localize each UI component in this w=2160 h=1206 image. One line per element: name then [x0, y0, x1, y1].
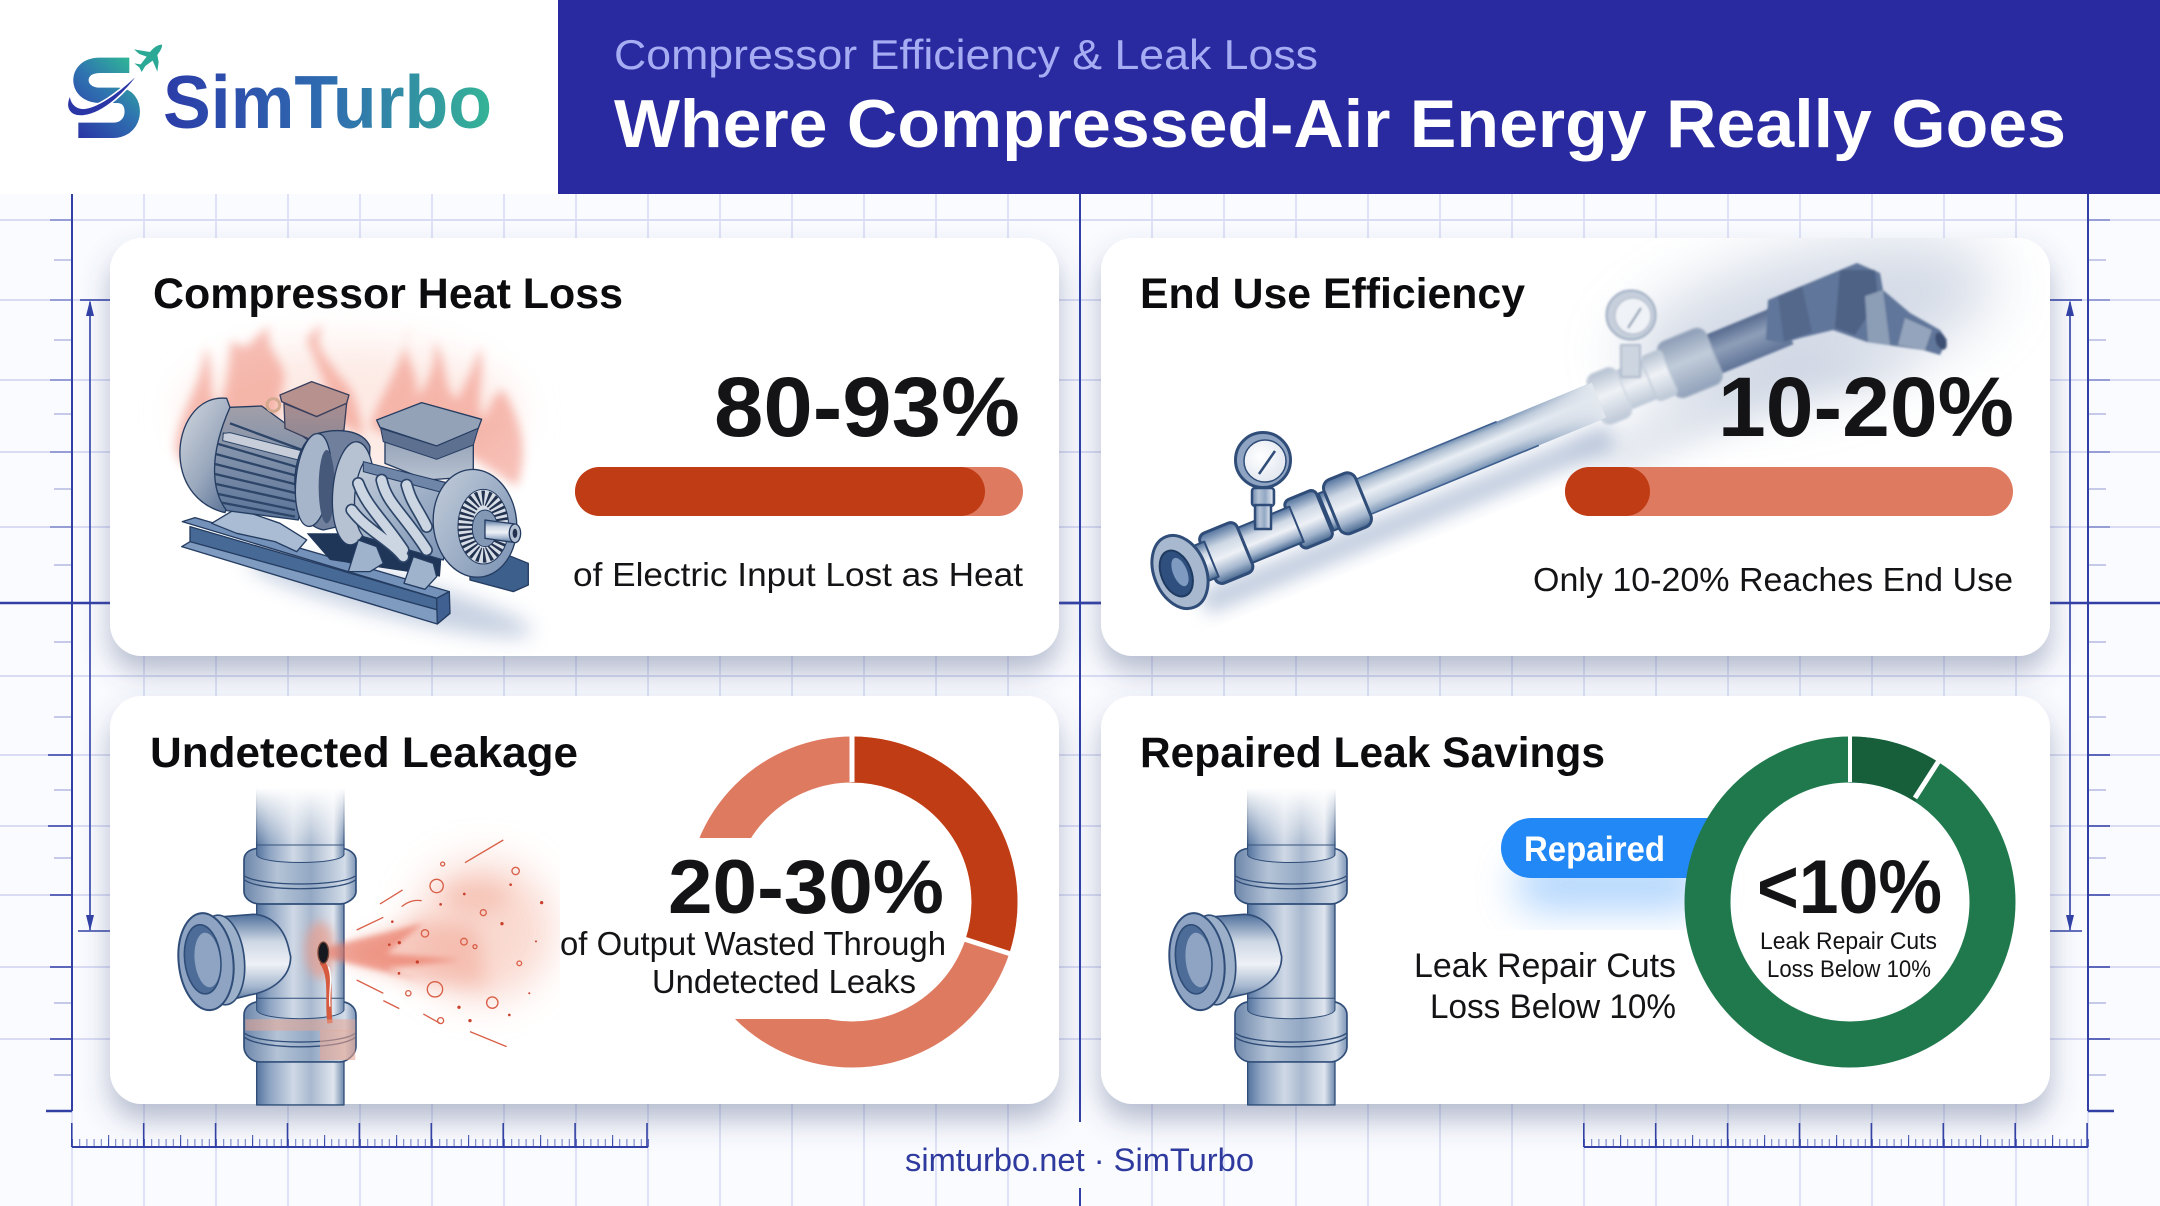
gauge near inlet	[1236, 432, 1290, 529]
faded gauge	[1606, 290, 1656, 377]
card heading: Repaired Leak Savings	[1140, 729, 1605, 777]
footer credit: simturbo.net · SimTurbo	[905, 1142, 1254, 1178]
illustration: compressor with flames	[175, 325, 537, 652]
panel: undetected leakage	[110, 696, 1059, 1105]
logo panel	[0, 0, 558, 194]
card heading: Compressor Heat Loss	[153, 270, 623, 318]
illustration: leaking pipe tee	[174, 780, 553, 1105]
donut caption: Loss Below 10%	[1767, 956, 1931, 983]
side caption: Loss Below 10%	[1430, 988, 1676, 1026]
text mask over donut	[560, 838, 850, 1019]
stat: 20-30%: 20-30%	[668, 845, 944, 930]
card heading: Undetected Leakage	[150, 729, 578, 777]
header subtitle: Compressor Efficiency & Leak Loss	[614, 31, 1318, 78]
haze behind pipe	[1582, 238, 2012, 467]
donut caption: Leak Repair Cuts	[1760, 928, 1937, 955]
donut chart: below 10%	[1708, 736, 1992, 1044]
header banner	[558, 0, 2160, 194]
logo wordmark: SimTurbo	[163, 60, 492, 144]
progress bar: 10-20%	[1565, 467, 2013, 516]
stat caption: Only 10-20% Reaches End Use	[1533, 561, 2013, 598]
stat: 80-93%: 80-93%	[714, 360, 1020, 454]
side caption	[1414, 947, 1676, 1026]
panel: end use efficiency	[1101, 206, 2050, 656]
main title: Where Compressed-Air Energy Really Goes	[614, 86, 2066, 162]
dark elbow fitting	[1766, 263, 1949, 355]
ruler: bottom right	[1583, 1135, 2089, 1147]
stat caption: of Electric Input Lost as Heat	[573, 556, 1023, 593]
stat caption: of Output Wasted Through	[560, 925, 946, 962]
panel: compressor heat loss	[110, 238, 1059, 656]
stat caption: Undetected Leaks	[652, 963, 916, 1000]
stat: 10-20%: 10-20%	[1718, 360, 2014, 454]
ruler: bottom left	[71, 1135, 649, 1147]
icon: SimTurbo S mark with airplane	[67, 45, 162, 130]
stat caption	[560, 925, 946, 1000]
side caption: Leak Repair Cuts	[1414, 947, 1676, 985]
illustration: repaired pipe tee	[1165, 780, 1347, 1105]
donut chart: 20-30%	[710, 736, 1014, 1044]
card heading: End Use Efficiency	[1140, 270, 1525, 318]
badge: repaired	[1501, 818, 1725, 910]
panel: repaired leak savings	[1101, 696, 2050, 1105]
illustration: pipe with gauges	[1142, 263, 1949, 628]
badge: repaired: Repaired	[1524, 830, 1665, 869]
donut caption	[1760, 928, 1937, 983]
progress bar: 80-93%	[575, 467, 1023, 516]
stat: below 10%: <10%	[1757, 845, 1942, 930]
